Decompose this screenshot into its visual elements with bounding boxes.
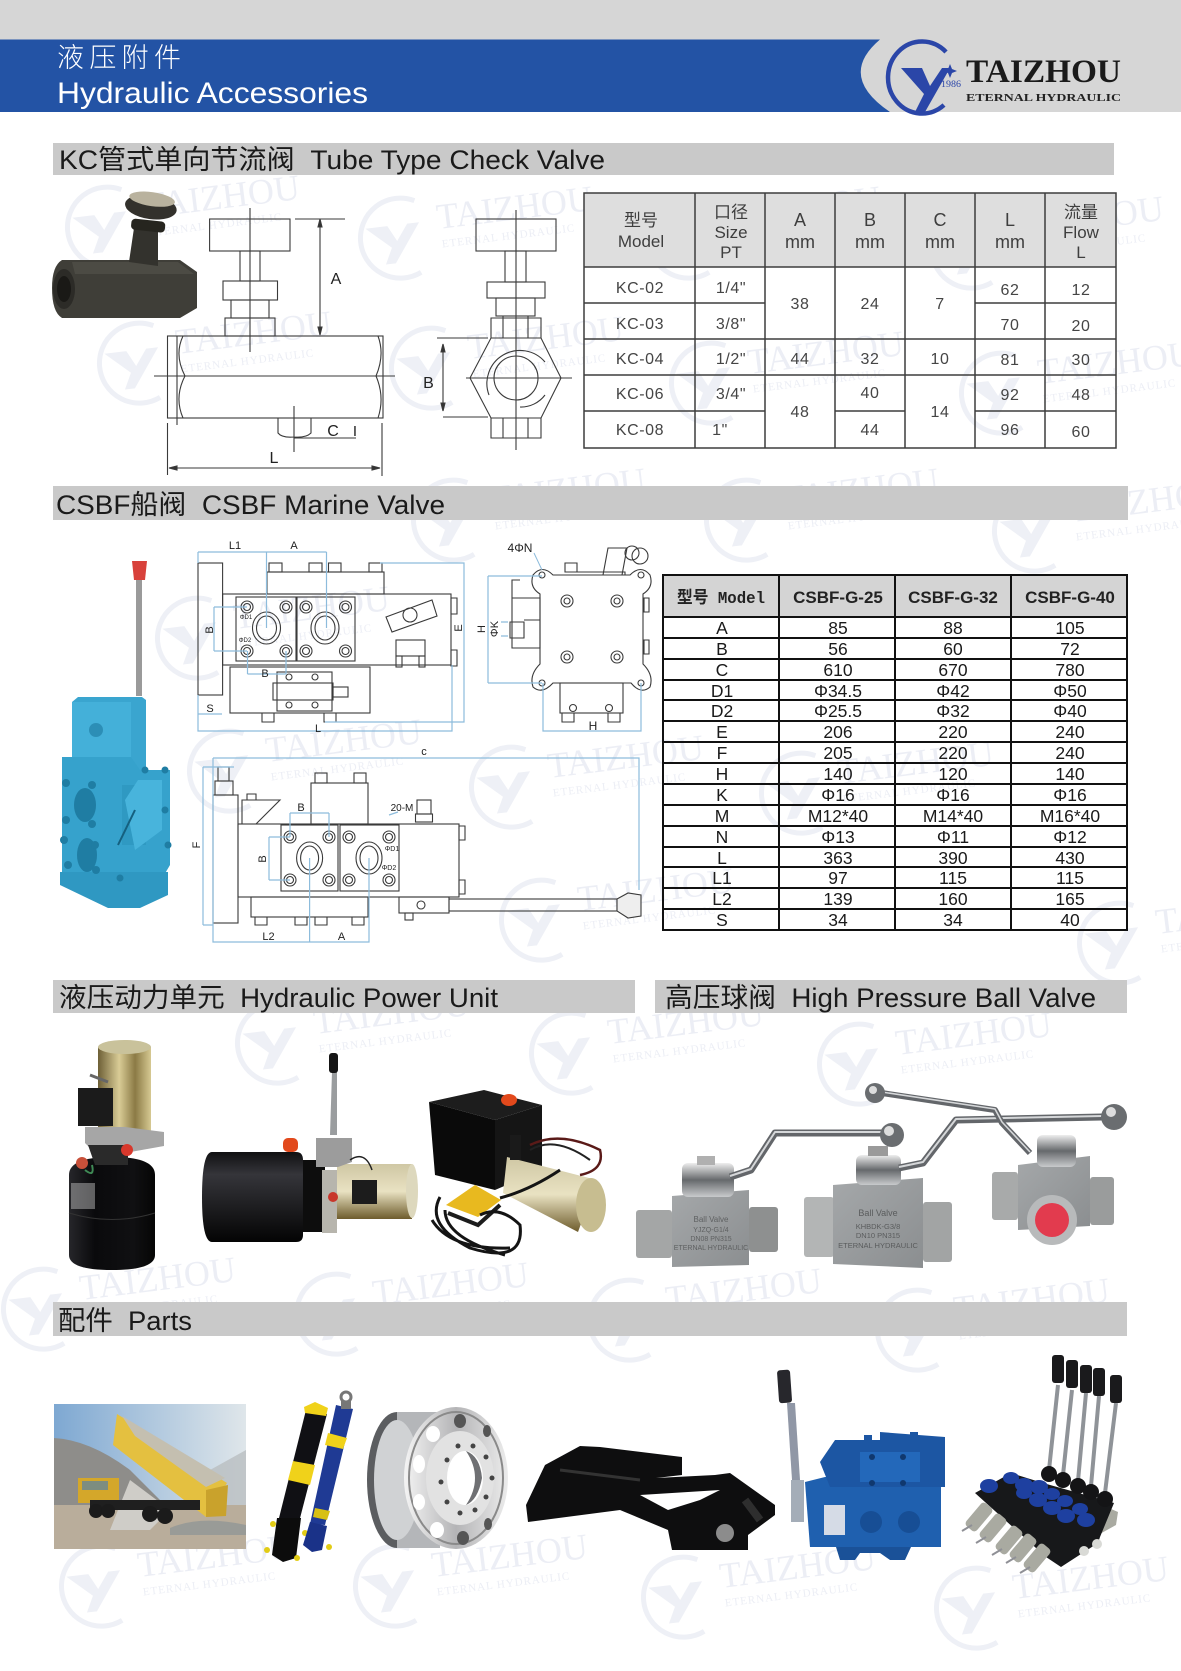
watermarks: TAIZHOU [429,1526,590,1585]
table values: 48 [790,404,810,421]
watermarks: ETERNAL HYDRAULIC [582,904,717,933]
table values: 56 [828,639,848,659]
table values: 92 [1000,387,1020,404]
watermarks: TAIZHOU [1005,188,1166,247]
watermarks: ETERNAL HYDRAULIC [377,1298,512,1327]
table values: Φ32 [936,701,970,721]
watermarks: ETERNAL HYDRAULIC [238,622,373,651]
table header: L [1005,210,1015,230]
table values: Φ12 [1053,827,1087,847]
photo: vertical power unit [69,1040,164,1270]
table header: 流量 [1064,203,1098,222]
table values: L [717,848,727,868]
photo: three-way ball valve right [865,1083,1114,1245]
label C: C [327,423,339,440]
watermarks: ETERNAL HYDRAULIC [472,352,607,381]
drawing: CSBF side view with handle [191,746,641,943]
table header: mm [855,232,885,252]
label ΦK rotated: ΦK [489,620,501,637]
label A: A [331,271,342,288]
table values: KC-03 [616,316,664,333]
photo: two-way ball valve middle: ETERNAL HYDRAULIC [838,1241,918,1250]
table grid [584,193,1116,448]
watermarks: TAIZHOU [1010,1548,1171,1607]
photo: two-way ball valve middle: KHBDK-G3/8 [856,1222,900,1231]
watermarks: ETERNAL HYDRAULIC [1042,377,1177,406]
table values: 140 [823,764,853,784]
logo: 1986 [941,79,962,89]
table values: 115 [1056,868,1084,888]
label I: I [353,423,357,440]
table values: Φ50 [1053,681,1087,701]
label 4ΦN: 4ΦN [508,541,532,555]
table values: 97 [828,868,848,888]
table values: 44 [860,422,880,439]
table header: CSBF-G-25 [793,588,883,607]
table values: 1/4" [716,280,746,297]
watermarks: TAIZHOU [835,733,996,792]
table values: H [716,764,728,784]
table values: K [716,785,728,805]
table values: C [716,660,728,680]
photo: multi-way manifold valve [962,1355,1122,1574]
label H rotated: H [476,625,488,633]
table values: 70 [1000,317,1020,334]
table header: L [1076,243,1086,262]
watermarks: TAIZHOU [605,993,766,1052]
watermarks: TAIZHOU [575,860,736,919]
table values: 220 [938,722,968,742]
table values: 140 [1055,764,1085,784]
table values: N [716,827,728,847]
table values: 40 [860,385,880,402]
photo: two-way ball valve left: Ball Valve [694,1215,729,1224]
watermarks: ETERNAL HYDRAULIC [142,1570,277,1599]
table values: D1 [711,681,733,701]
photo: KC check valve [52,189,197,318]
watermarks: ETERNAL HYDRAULIC [958,1314,1093,1343]
photo: CSBF marine valve [60,561,172,908]
watermarks: ETERNAL HYDRAULIC [318,1027,453,1056]
label ΦD2: ΦD2 [382,865,396,872]
label D2: ΦD2 [239,638,252,644]
photo: horizontal power unit [202,1053,418,1242]
photo: two-way ball valve left: YJZQ-G1/4 [693,1227,729,1234]
table values: Φ16 [821,785,855,805]
section heading: KC tube type check valve: KC管式单向节流阀 Tube Type Check Valve [59,145,605,175]
table values: KC-02 [616,280,664,297]
table values: 81 [1000,352,1020,369]
label c: c [421,746,427,758]
photo: two-way ball valve middle [804,1104,1127,1268]
table: KC specifications [584,193,1116,448]
table values: 120 [938,764,968,784]
table values: 85 [828,618,848,638]
table values: 14 [930,404,950,421]
label E rotated: E [453,624,465,632]
table values: 610 [823,660,853,680]
logo background panel [855,40,1181,112]
table values: S [716,910,728,930]
title english: Hydraulic Accessories [57,77,368,110]
label L1: L1 [229,540,241,552]
watermarks: ETERNAL HYDRAULIC [670,1304,805,1333]
watermarks: ETERNAL HYDRAULIC [1012,232,1147,261]
table values: 205 [823,743,853,763]
watermarks: TAIZHOU [951,1270,1112,1329]
table values: Φ16 [936,785,970,805]
watermarks: ETERNAL HYDRAULIC [436,1570,571,1599]
table header: 口径 [714,203,748,222]
watermarks: ETERNAL HYDRAULIC [787,504,922,533]
table values: D2 [711,701,733,721]
section heading: CSBF marine valve: CSBF船阀 CSBF Marine Valve [56,490,445,520]
watermarks: TAIZHOU [135,1526,296,1585]
table values: 30 [1072,352,1090,369]
label B inner: B [261,668,269,680]
label L: L [270,450,279,467]
table values: 7 [935,296,945,313]
photo: hydraulic cylinders [264,1392,353,1562]
section heading: high pressure ball valve: 高压球阀 High Pressure Ball Valve [665,983,1096,1013]
table values: 48 [1072,387,1090,404]
table values: 3/4" [716,386,746,403]
table header: B [864,210,876,230]
table values: E [716,722,728,742]
label F rotated: F [191,841,203,848]
photo: dump truck [54,1404,246,1549]
watermarks: TAIZHOU [434,178,595,237]
table header: mm [785,232,815,252]
table values: 390 [938,848,968,868]
table values: 363 [823,848,853,868]
label S: S [206,703,214,715]
section heading: hydraulic power unit: 液压动力单元 Hydraulic Power Unit [59,983,499,1013]
table header: mm [995,232,1025,252]
watermarks: ETERNAL HYDRAULIC [1017,1592,1152,1621]
table values: M16*40 [1040,806,1100,826]
watermarks: ETERNAL HYDRAULIC [84,1293,219,1322]
table values: 206 [823,722,853,742]
table values: Φ42 [936,681,970,701]
photo: black bracket [526,1446,775,1550]
label ΦD1: ΦD1 [385,846,399,853]
table values: 10 [930,351,950,368]
watermarks: ETERNAL HYDRAULIC [612,1037,747,1066]
table header: Flow [1063,223,1100,242]
logo: TAIZHOU [966,54,1121,90]
section heading: KC tube type check valve [53,143,1114,175]
watermarks: ETERNAL HYDRAULIC [729,222,864,251]
table values: 44 [790,351,810,368]
table values: Φ25.5 [814,701,862,721]
table values: 60 [943,639,963,659]
table values: 96 [1000,422,1020,439]
table values: 20 [1072,318,1090,335]
table values: 105 [1055,618,1085,638]
photo: aluminium wheel rim [367,1407,508,1549]
table values: KC-08 [616,422,664,439]
photo: box power unit [429,1090,606,1255]
section heading: parts: 配件 Parts [58,1306,192,1336]
drawing: CSBF top view [198,540,465,735]
label L2: L2 [262,931,275,943]
logo [888,42,1121,114]
table values: Φ34.5 [814,681,862,701]
table values: Φ16 [1053,785,1087,805]
table values: 670 [938,660,968,680]
table values: L1 [712,868,732,888]
table values: 240 [1055,722,1085,742]
watermarks: TAIZHOU [745,323,906,382]
watermarks: TAIZHOU [173,303,334,362]
table values: KC-04 [616,351,664,368]
watermarks: ETERNAL HYDRAULIC [752,367,887,396]
watermarks: TAIZHOU [465,308,626,367]
table header: CSBF-G-40 [1025,588,1115,607]
table values [711,618,1100,930]
watermarks: TAIZHOU [370,1254,531,1313]
watermarks: TAIZHOU [663,1260,824,1319]
table values: 34 [943,910,963,930]
title chinese: 液压附件 [57,43,181,73]
table values: 3/8" [716,316,746,333]
drawing: KC front view [154,208,395,476]
table values: 139 [823,889,853,909]
table values: 34 [828,910,848,930]
table values: M [715,806,729,826]
label B top: B [297,802,305,814]
watermarks: ETERNAL HYDRAULIC [552,771,687,800]
watermarks: ETERNAL HYDRAULIC [494,504,629,533]
watermarks: TAIZHOU [780,460,941,519]
watermarks: ETERNAL HYDRAULIC [724,1581,859,1610]
table values: Φ13 [821,827,855,847]
table values: M12*40 [808,806,868,826]
table header: A [794,210,806,230]
table header: 型号 Model [677,588,765,609]
photo: blue directional valve [777,1370,945,1560]
table header: PT [720,243,742,262]
table values: 72 [1060,639,1080,659]
table values: 60 [1072,424,1090,441]
logo: ETERNAL HYDRAULIC [966,92,1121,104]
table values: A [716,618,728,638]
watermarks: ETERNAL HYDRAULIC [148,211,283,240]
drawing: KC side view [423,210,572,450]
photo: two-way ball valve left [636,1123,904,1267]
table values: 220 [938,743,968,763]
watermarks: TAIZHOU [141,167,302,226]
watermarks: TAIZHOU [545,727,706,786]
watermarks: TAIZHOU [722,178,883,237]
table values: 430 [1055,848,1085,868]
table values: 40 [1060,910,1080,930]
table values: 160 [938,889,968,909]
label A: A [338,931,346,943]
photo: two-way ball valve left: DN08 PN315 [690,1236,732,1243]
photo: two-way ball valve middle: Ball Valve [858,1208,898,1218]
watermarks: ETERNAL HYDRAULIC [270,755,405,784]
label H bottom: H [589,719,597,733]
page header [0,0,1181,114]
table values: 24 [860,296,880,313]
table values: Φ11 [937,827,969,847]
label L: L [315,723,321,735]
table header: 型号 [624,211,658,230]
photo: two-way ball valve left: ETERNAL HYDRAULIC [674,1245,748,1252]
table values: M14*40 [923,806,983,826]
watermarks: TAIZHOU [263,711,424,770]
table values: 1/2" [716,351,746,368]
table header: Model [618,232,664,251]
table values: F [717,743,727,763]
photo: two-way ball valve middle: DN10 PN315 [856,1231,900,1240]
table: CSBF specifications [663,575,1127,930]
table header [663,575,1127,617]
table values: 32 [860,351,880,368]
watermarks: ETERNAL HYDRAULIC [900,1048,1035,1077]
table header: CSBF-G-32 [908,588,998,607]
blue title band [0,40,890,112]
watermarks: TAIZHOU [311,983,472,1042]
watermarks: TAIZHOU [487,460,648,519]
label B rotated: B [257,855,269,863]
label 20-M: 20-M [391,803,413,814]
label A: A [290,540,298,552]
watermarks: TAIZHOU [231,578,392,637]
table values: 165 [1055,889,1085,909]
table header: mm [925,232,955,252]
section heading: parts [53,1302,1127,1336]
table values: 1" [712,422,728,439]
table values: 62 [1000,282,1020,299]
watermarks: TAIZHOU [77,1249,238,1308]
table values: Φ40 [1053,701,1087,721]
table values: 115 [939,868,967,888]
watermarks: TAIZHOU [893,1004,1054,1063]
table header [584,193,1116,267]
table values: 780 [1055,660,1085,680]
watermarks: ETERNAL HYDRAULIC [441,222,576,251]
watermarks: ETERNAL HYDRAULIC [180,347,315,376]
table values: 12 [1072,282,1090,299]
table header: C [934,210,946,230]
label B: B [423,375,434,392]
table values: 88 [943,618,963,638]
label D1: ΦD1 [240,615,253,621]
watermarks: ETERNAL HYDRAULIC [842,777,977,806]
section heading: CSBF marine valve [53,486,1128,520]
table values: B [716,639,728,659]
table header: Size [714,223,748,242]
table values [616,280,1090,441]
table values: 240 [1055,743,1085,763]
table grid [663,575,1127,930]
table values: 38 [790,296,810,313]
table values: L2 [712,889,732,909]
watermarks: TAIZHOU [717,1537,878,1596]
label B rotated: B [204,626,216,634]
drawing: CSBF end view [476,541,651,733]
table values: KC-06 [616,386,664,403]
section heading: hydraulic power unit [53,980,635,1013]
